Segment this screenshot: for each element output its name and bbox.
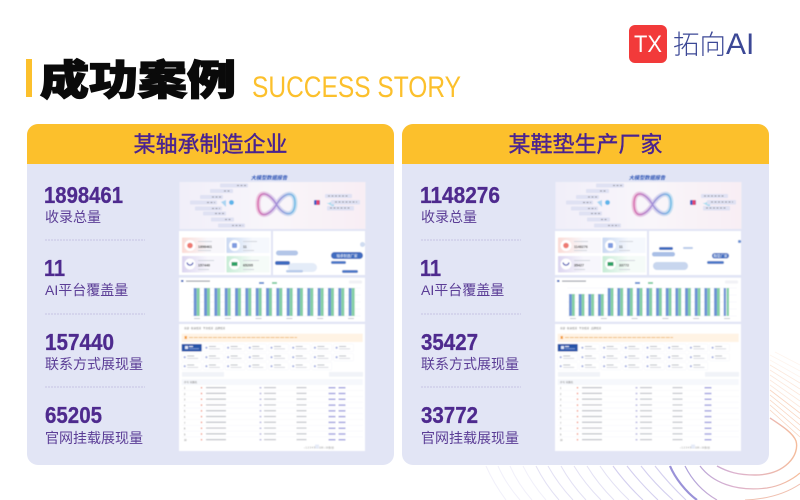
panel header [27,124,394,164]
panel header: 某鞋垫生产厂家 [508,127,663,159]
stat: platforms: 11 [44,255,65,281]
dashboard screenshot: 平台情况 [579,326,590,330]
panel header [402,124,769,164]
dashboard screenshot: ‹ 1 2 3 4 5 … 100 › 10条/页 [680,446,711,450]
dashboard screenshot: 33772 [619,264,629,268]
dashboard screenshot: 平台情况 [203,326,214,330]
stat: website: 33772 [421,402,478,428]
dashboard screenshot: 8 [184,429,186,431]
panel header: 某轴承制造企业 [133,127,288,159]
bar chart [194,288,355,316]
dashboard screenshot [179,174,366,451]
title accent bar [26,59,32,97]
stat: total: 1148276 [420,182,500,208]
dashboard screenshot: 3 [184,400,186,402]
stat: platforms: 11 [420,255,441,281]
title: 成功案例 [40,46,236,106]
dashboard screenshot: 收录情况 [191,326,202,330]
subtitle: SUCCESS STORY [252,71,461,104]
panel: bearing manufacturer [27,124,394,465]
dashboard screenshot: 1 [560,388,562,390]
dashboard screenshot: 序号 问题名 [560,380,574,384]
stat: total: 收录总量 [45,209,101,225]
dashboard screenshot: 大模型数据报告 [629,174,666,182]
dashboard screenshot: 品牌情况 [215,326,226,330]
dashboard screenshot: 10 [184,440,187,442]
stat: contact [45,329,143,372]
dashboard screenshot: 品牌情况 [591,326,602,330]
dashboard screenshot: 7 [560,423,562,425]
dashboard screenshot: 序号 问题名 [184,380,198,384]
stat: total: 收录总量 [421,209,477,225]
stat: contact: 联系方式展现量 [421,356,519,372]
dashboard screenshot: 1 [184,388,186,390]
dashboard screenshot: 全部 [184,326,190,330]
logo [629,23,754,63]
dashboard screenshot: 157440 [198,264,210,268]
dashboard screenshot: 2 [184,394,186,396]
dashboard screenshot: 6 [184,417,186,419]
stat: platforms: AI平台覆盖量 [421,282,504,298]
dashboard screenshot: 7 [184,423,186,425]
dashboard screenshot: 大模型数据报告 [251,174,288,182]
dashboard screenshot: 5 [560,411,562,413]
logo wordmark: 拓向AI [673,23,754,62]
panel: insole manufacturer [402,124,769,465]
stat: platforms [420,255,504,298]
stat: website: 官网挂载展现量 [45,430,143,446]
dashboard screenshot: 收录情况 [567,326,578,330]
stat: total: 1898461 [44,182,123,208]
stat: contact: 35427 [421,329,478,355]
dashboard screenshot: 4 [184,405,186,407]
dashboard screenshot: 65205 [243,264,253,268]
dashboard screenshot: 9 [560,434,562,436]
bar chart [569,302,729,305]
stat: website: 65205 [45,402,102,428]
stat: total [44,182,123,225]
word cloud [652,240,741,270]
word cloud: 轴承制造厂家 [336,253,358,259]
dashboard screenshot: ‹ 1 2 3 4 5 … 100 › 10条/页 [304,446,335,450]
dashboard screenshot [555,174,742,451]
stat: website [421,402,519,446]
stat: website [45,402,143,446]
dashboard screenshot: 11 [243,245,247,249]
background arcs [486,352,800,500]
word cloud: 鞋垫厂家 [714,253,728,259]
dashboard screenshot: 4 [560,405,562,407]
dashboard screenshot: 6 [560,417,562,419]
dashboard screenshot: 全部 [560,326,566,330]
stat: contact: 联系方式展现量 [45,356,143,372]
stat: contact [421,329,519,372]
word cloud [275,242,365,273]
dashboard screenshot: 2 [560,394,562,396]
stat: total [420,182,500,225]
dashboard screenshot: 11 [619,245,623,249]
stat: platforms [44,255,128,298]
dashboard screenshot: 3 [560,400,562,402]
dashboard screenshot: 1148276 [574,245,588,249]
dashboard screenshot: 1898461 [198,245,212,249]
dashboard screenshot: 9 [184,434,186,436]
logo icon: TX [634,31,662,58]
dashboard screenshot: 5 [184,411,186,413]
stat: website: 官网挂载展现量 [421,430,519,446]
dashboard screenshot: 35427 [574,264,584,268]
stat: platforms: AI平台覆盖量 [45,282,128,298]
dashboard screenshot: 10 [560,440,563,442]
dashboard screenshot: 8 [560,429,562,431]
stat: contact: 157440 [45,329,114,355]
